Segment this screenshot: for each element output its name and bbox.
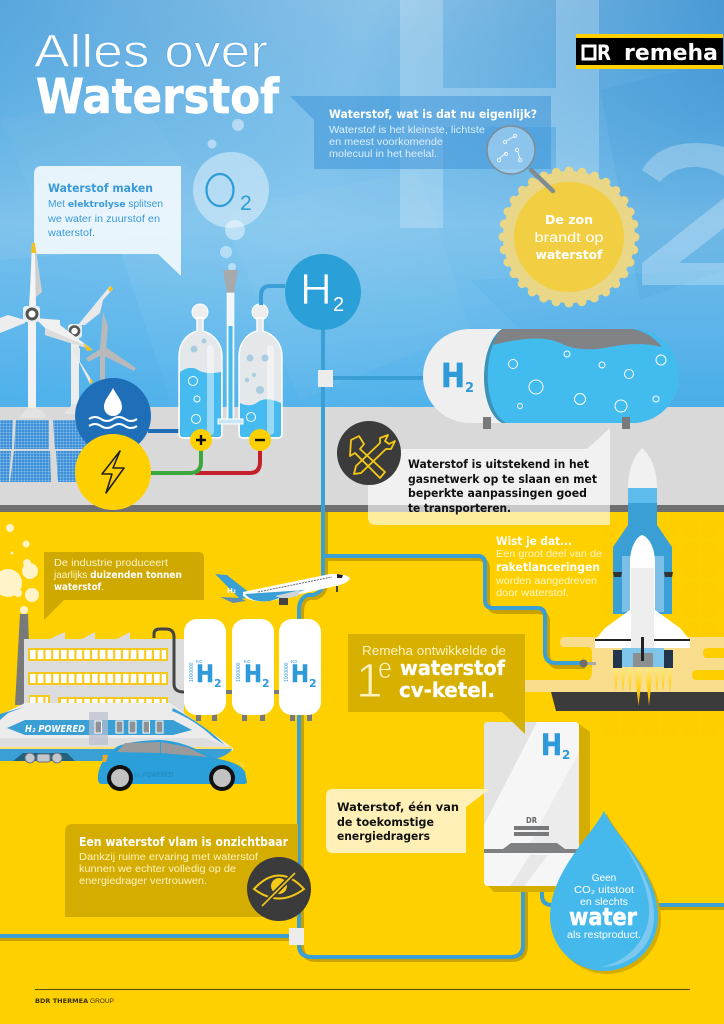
icon: tools — [337, 421, 401, 485]
wind turbine mid — [65, 286, 113, 414]
logo: remeha — [576, 34, 723, 69]
water drop: als restproduct. — [567, 930, 641, 941]
oxygen bubble O2 — [193, 119, 269, 271]
callout: invisible flame: Een waterstof vlam is onzichtbaar — [79, 835, 288, 849]
storage tank — [423, 329, 679, 429]
title: Waterstof — [36, 69, 280, 125]
callout: rocket fact: Een groot deel van de — [496, 548, 602, 560]
callout: energy carriers: de toekomstige — [337, 815, 434, 829]
plus terminal — [190, 429, 212, 451]
footer: BDR THERMEA GROUP — [35, 997, 114, 1005]
minus terminal — [249, 429, 271, 451]
callout: making hydrogen: waterstof. — [47, 228, 95, 239]
icon: magnifying glass — [487, 126, 553, 191]
wind turbine near — [0, 243, 93, 418]
water and power pipes — [148, 431, 260, 473]
callout: rocket fact: door waterstof. — [496, 587, 569, 599]
main hydrogen pipes — [0, 286, 724, 960]
rocket — [595, 448, 690, 706]
callout: gas network — [368, 428, 610, 525]
pipe junction upper — [318, 370, 333, 387]
callout: energy carriers: energiedragers — [337, 829, 430, 843]
H2 circle: 2 — [333, 294, 344, 316]
solar panels — [0, 420, 90, 482]
airplane — [215, 574, 350, 605]
callout: rocket fact: worden aangedreven — [495, 575, 597, 587]
logo: remeha: R — [597, 41, 611, 65]
callout: making hydrogen: we water in zuurstof en — [47, 214, 160, 225]
electrolysis flask right — [239, 304, 282, 438]
car: H₂ POWERED — [135, 772, 173, 779]
callout: industry: De industrie produceert — [54, 557, 168, 569]
sun badge: brandt op — [534, 230, 604, 245]
boiler — [484, 722, 590, 892]
callout: invisible flame — [65, 824, 298, 917]
water drop: Geen — [592, 873, 616, 884]
logo: remeha: remeha — [624, 41, 718, 66]
electrolysis flask left — [179, 304, 222, 438]
train: H₂ POWERED — [25, 724, 85, 735]
callout: gas network: Waterstof is uitstekend in het — [408, 457, 589, 471]
H2 circle — [285, 254, 361, 330]
water drop: en slechts — [580, 897, 628, 908]
callout: what is hydrogen: en meest voorkomende — [329, 137, 443, 148]
wind turbine far — [86, 312, 136, 408]
callout: making hydrogen: Met elektrolyse splitsen — [48, 199, 163, 210]
storage cylinders: H — [291, 660, 309, 688]
central tube — [218, 270, 243, 424]
big letter H backdrop — [400, 0, 599, 228]
callout: first boiler — [348, 634, 525, 734]
callout: rocket fact — [495, 534, 602, 599]
callout: what is hydrogen: Waterstof is het kleinste, lichtste — [329, 125, 485, 136]
callout: industry: waterstof. — [54, 581, 104, 593]
icon: electricity — [75, 434, 151, 510]
water drop: water — [569, 903, 637, 931]
launch platform and clouds — [520, 637, 724, 711]
callout: invisible flame: energiedrager vertrouwen. — [79, 875, 207, 887]
factory — [15, 614, 184, 715]
icon: water — [75, 378, 151, 454]
storage tank: H — [441, 356, 465, 395]
callout: making hydrogen: Waterstof maken — [48, 181, 153, 195]
storage cylinders: 1000000 — [236, 662, 242, 682]
storage cylinders: 1000000 — [189, 662, 195, 682]
storage cylinders: 1000000 — [284, 662, 290, 682]
callout: invisible flame: kunnen we echter volledig op de — [79, 863, 236, 875]
boiler: DR — [526, 816, 537, 825]
callout: energy carriers — [326, 789, 490, 853]
storage cylinders — [184, 619, 321, 721]
callout: rocket fact: Wist je dat... — [496, 534, 572, 548]
callout: gas network: beperkte aanpassingen goed — [408, 486, 587, 500]
callout: gas network: te transporteren. — [408, 501, 511, 515]
car — [98, 740, 247, 791]
callout: making hydrogen — [34, 166, 181, 276]
callout: first boiler: 1 — [356, 655, 383, 708]
callout: what is hydrogen: Waterstof, wat is dat nu eigenlijk? — [329, 107, 537, 121]
storage cylinders: KG — [196, 659, 203, 664]
oxygen bubble O2: 2 — [240, 192, 252, 215]
callout: first boiler: Remeha ontwikkelde de — [362, 644, 506, 658]
sky background — [0, 0, 724, 408]
callout: gas network: gasnetwerk op te slaan en met — [408, 472, 597, 486]
storage cylinders: KG — [244, 659, 251, 664]
airplane: H₂ — [227, 587, 236, 595]
faint tile pattern — [600, 520, 724, 740]
callout: industry — [44, 552, 204, 620]
storage tank: 2 — [465, 381, 474, 396]
callout: first boiler: cv-ketel. — [399, 678, 495, 702]
storage cylinders: 2 — [262, 677, 270, 690]
storage cylinders: KG — [291, 659, 298, 664]
callout: first boiler: e — [378, 652, 392, 685]
sun badge — [503, 171, 635, 303]
callout: rocket fact: raketlanceringen — [496, 560, 600, 574]
pipe junction lower — [289, 928, 304, 945]
factory smoke bubbles — [0, 524, 39, 614]
callout: energy carriers: Waterstof, één van — [337, 800, 459, 814]
sun badge: waterstof — [536, 248, 603, 262]
callout: industry: jaarlijks duizenden tonnen — [53, 569, 182, 581]
callout: first boiler: waterstof — [400, 656, 505, 680]
storage cylinders: 2 — [309, 677, 317, 690]
boiler: 2 — [562, 748, 570, 762]
storage cylinders: 2 — [214, 677, 222, 690]
callout: what is hydrogen: molecuul in het heelal. — [329, 149, 437, 160]
pipe connector dot — [580, 660, 596, 668]
yellow lower background — [0, 512, 724, 1024]
storage cylinders: H — [196, 660, 214, 688]
water drop — [550, 811, 661, 974]
storage cylinders: H — [244, 660, 262, 688]
icon: crossed-out eye — [247, 857, 311, 921]
boiler: H — [541, 728, 562, 762]
callout: invisible flame: Dankzij ruime ervaring met waterstof — [79, 851, 258, 863]
big number 2 backdrop — [642, 143, 724, 285]
title — [34, 25, 280, 125]
water drop: CO₂ uitstoot — [574, 885, 634, 896]
callout: what is hydrogen — [290, 96, 551, 169]
H2 circle: H — [300, 265, 332, 314]
title: Alles over — [34, 25, 268, 77]
ground band — [0, 407, 724, 512]
sun badge: De zon — [545, 213, 593, 227]
train — [0, 703, 233, 763]
